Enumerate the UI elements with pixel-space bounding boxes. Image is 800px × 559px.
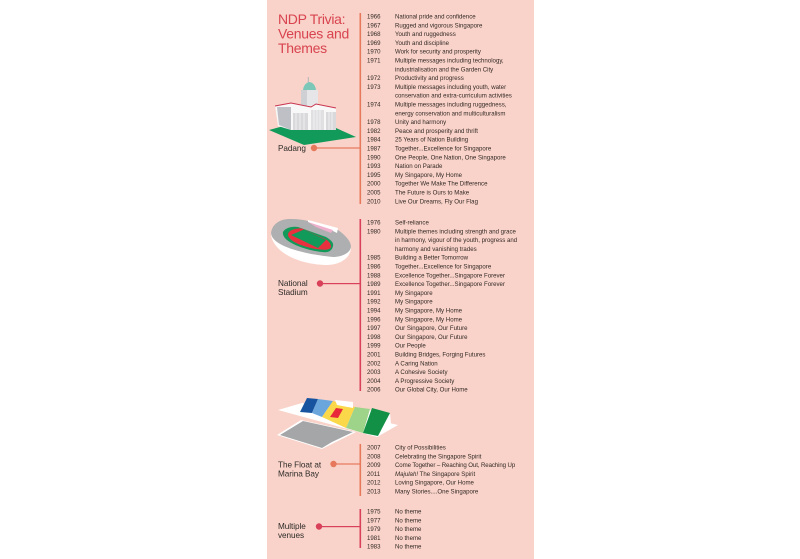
list: Multiple venues: No theme — [395, 544, 422, 550]
list: National Stadium themes: 1992 — [367, 299, 381, 306]
list: Padang themes: 1990 — [367, 154, 381, 161]
list: Multiple venues — [367, 508, 422, 550]
list: National Stadium themes: 1976 — [367, 220, 381, 226]
list: Float themes: 2013 — [367, 488, 381, 496]
icon: Padang building — [269, 77, 356, 145]
list: Multiple venues: 1975 — [367, 508, 381, 516]
list: Padang themes: 2005 — [367, 190, 381, 196]
list: Padang themes: 1987 — [367, 146, 381, 152]
list: Padang themes: Rugged and vigorous Singapore — [395, 22, 483, 29]
label: National Stadium with connector: National — [278, 279, 308, 288]
list: Multiple venues: 1979 — [367, 526, 381, 533]
list: National Stadium themes: 2002 — [367, 360, 381, 367]
list: Float themes — [367, 444, 516, 496]
list: Multiple venues: No theme — [395, 526, 422, 533]
list: Padang themes: The Future is Ours to Make — [395, 190, 470, 196]
list: Multiple venues: No theme — [395, 508, 422, 516]
list: Padang themes: 1984 — [367, 137, 381, 144]
title: NDP Trivia: — [278, 11, 345, 27]
list: Padang themes: conservation and extra-curriculum activities — [395, 93, 512, 100]
list: Float themes: Loving Singapore, Our Home — [395, 480, 475, 487]
list: Padang themes: 1973 — [367, 84, 381, 91]
list: National Stadium themes: Self-reliance — [395, 220, 429, 226]
list: Padang themes: Peace and prosperity and thrift — [395, 128, 478, 135]
list: National Stadium themes: 2006 — [367, 386, 381, 394]
list: Float themes: 2011 — [367, 471, 381, 478]
list: Float themes: 2012 — [367, 480, 381, 487]
label: The Float at Marina Bay with connector: Marina Bay — [278, 470, 320, 478]
list: Padang themes: 1982 — [367, 128, 381, 135]
list: National Stadium themes: A Caring Nation — [395, 360, 438, 367]
list: National Stadium themes: 1991 — [367, 290, 381, 297]
list: National Stadium themes: My Singapore — [395, 299, 433, 306]
list: Padang themes: 1967 — [367, 22, 381, 29]
list: Padang themes — [367, 14, 512, 206]
list: Padang themes: Together We Make The Difference — [395, 181, 488, 188]
label: The Float at Marina Bay with connector — [278, 444, 361, 496]
label: The Float at Marina Bay with connector: The Float at — [278, 460, 322, 470]
list: Padang themes: Live Our Dreams, Fly Our Flag — [395, 198, 478, 206]
list: Padang themes: Together...Excellence for Singapore — [395, 146, 492, 152]
list: Padang themes: 1993 — [367, 163, 381, 170]
list: Padang themes: 1972 — [367, 75, 381, 82]
list: National Stadium themes: Excellence Together...Singapore Forever — [395, 272, 505, 279]
list: Float themes: Many Stories....One Singapore — [395, 488, 479, 496]
list: Multiple venues: No theme — [395, 517, 422, 524]
list: National Stadium themes: 1985 — [367, 255, 381, 262]
label: Padang with connector — [278, 13, 361, 204]
list: Padang themes: Productivity and progress — [395, 75, 464, 82]
list: National Stadium themes: 2001 — [367, 352, 381, 358]
list: National Stadium themes: 1997 — [367, 325, 381, 332]
list: National Stadium themes: Building Bridges, Forging Futures — [395, 352, 485, 358]
list: National Stadium themes: 1986 — [367, 264, 381, 270]
list: Float themes: 2007 — [367, 444, 381, 452]
list: Padang themes: 2000 — [367, 181, 381, 188]
list: Padang themes: energy conservation and multiculturalism — [395, 110, 505, 117]
list: Float themes: Majulah! The Singapore Spirit — [395, 471, 475, 478]
icon: The Float at Marina Bay — [277, 398, 398, 449]
list: Padang themes: My Singapore, My Home — [395, 172, 463, 179]
list: National Stadium themes: Our Global City, Our Home — [395, 386, 468, 394]
list: National Stadium themes: 1980 — [367, 228, 381, 235]
list: National Stadium themes: Our People — [395, 343, 426, 350]
list: Padang themes: One People, One Nation, One Singapore — [395, 154, 506, 161]
list: Padang themes: Multiple messages including technology, — [395, 58, 504, 64]
list: National Stadium themes: Excellence Together...Singapore Forever — [395, 281, 505, 288]
list: National Stadium themes: My Singapore, My Home — [395, 316, 463, 323]
list: National Stadium themes: Our Singapore, Our Future — [395, 334, 468, 341]
list: Padang themes: 1970 — [367, 49, 381, 56]
list: National Stadium themes: 1989 — [367, 281, 381, 288]
list: National Stadium themes: harmony and vanishing trades — [395, 246, 477, 253]
list: Padang themes: Work for security and prosperity — [395, 49, 482, 56]
list: Padang themes: Youth and ruggedness — [395, 31, 456, 38]
list: Padang themes: 2010 — [367, 198, 381, 206]
list: National Stadium themes: My Singapore — [395, 290, 433, 297]
list: Padang themes: 1971 — [367, 58, 381, 64]
list: National Stadium themes: 1996 — [367, 316, 381, 323]
list: Padang themes: Multiple messages including ruggedness, — [395, 102, 507, 108]
list: National Stadium themes: 1994 — [367, 308, 381, 314]
list: National Stadium themes: A Progressive Society — [395, 378, 455, 385]
list: Padang themes: 1974 — [367, 102, 381, 108]
list: National Stadium themes — [367, 220, 517, 394]
list: Float themes: City of Possibilities — [395, 444, 446, 452]
list: Multiple venues: 1977 — [367, 517, 381, 524]
label: Multiple venues with connector: Multiple — [278, 522, 306, 531]
list: National Stadium themes: 1988 — [367, 272, 381, 279]
list: Padang themes: 1966 — [367, 14, 381, 20]
label: National Stadium with connector — [278, 219, 361, 391]
icon: National Stadium — [271, 219, 351, 265]
title: Venues and — [278, 26, 349, 42]
list: Padang themes: 1968 — [367, 31, 381, 38]
list: National Stadium themes: 1999 — [367, 343, 381, 350]
label: Multiple venues with connector: venues — [278, 531, 304, 540]
list: National Stadium themes: Together...Excellence for Singapore — [395, 264, 492, 270]
list: Padang themes: 1969 — [367, 40, 381, 47]
list: Float themes: 2008 — [367, 453, 381, 460]
title: Themes — [278, 40, 327, 56]
list: National Stadium themes: Building a Better Tomorrow — [395, 255, 469, 262]
list: National Stadium themes: 2004 — [367, 378, 381, 385]
panel: background — [267, 0, 534, 559]
list: National Stadium themes: 1998 — [367, 334, 381, 341]
list: National Stadium themes: 2003 — [367, 369, 381, 376]
label: Multiple venues with connector — [278, 509, 361, 548]
list: Multiple venues: No theme — [395, 535, 422, 542]
list: National Stadium themes: in harmony, vigour of the youth, progress and — [395, 237, 517, 244]
list: National Stadium themes: Multiple themes including strength and grace — [395, 228, 517, 235]
title — [278, 11, 349, 56]
list: Padang themes: Youth and discipline — [395, 40, 450, 47]
list: Padang themes: 25 Years of Nation Building — [395, 137, 468, 144]
list: National Stadium themes: My Singapore, My Home — [395, 308, 463, 314]
list: Padang themes: industrialisation and the Garden City — [395, 66, 494, 73]
list: Padang themes: Multiple messages including youth, water — [395, 84, 506, 91]
list: Padang themes: Nation on Parade — [395, 163, 443, 170]
list: Float themes: 2009 — [367, 462, 381, 469]
list: Padang themes: National pride and confidence — [395, 14, 476, 20]
list: Float themes: Come Together – Reaching Out, Reaching Up — [395, 462, 516, 469]
list: Padang themes: 1995 — [367, 172, 381, 179]
list: Float themes: Celebrating the Singapore Spirit — [395, 453, 482, 460]
list: Multiple venues: 1981 — [367, 535, 381, 542]
list: National Stadium themes: A Cohesive Society — [395, 369, 448, 376]
list: National Stadium themes: Our Singapore, Our Future — [395, 325, 468, 332]
list: Multiple venues: 1983 — [367, 544, 381, 550]
list: Padang themes: 1978 — [367, 119, 381, 126]
label: Padang with connector: Padang — [278, 144, 306, 153]
list: Padang themes: Unity and harmony — [395, 119, 447, 126]
label: National Stadium with connector: Stadium — [278, 288, 308, 297]
